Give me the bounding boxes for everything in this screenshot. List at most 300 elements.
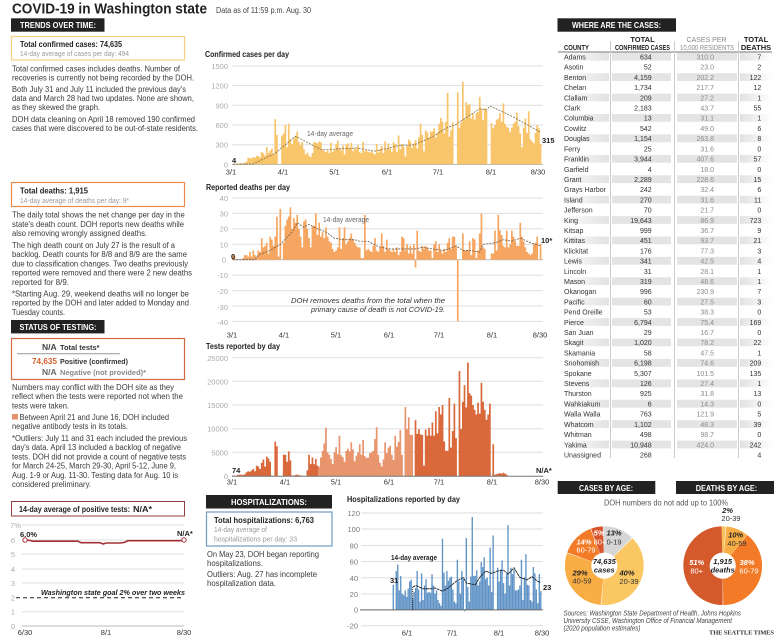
callout: test totals: Total tests*: [60, 343, 100, 352]
callout: positive test average: N/A*: [133, 504, 153, 514]
table: cases per 10,000 residents: 27.2: [700, 95, 714, 102]
table: county names: Pierce: [564, 320, 584, 327]
text block: deaths notes: also removing wrongly assigned deaths.: [12, 229, 147, 238]
table: cases per 10,000 residents: 23.0: [700, 65, 714, 72]
donut chart: cases by age: 74,635: [593, 557, 617, 566]
chart: confirmed cases per day: 300: [215, 141, 228, 150]
table: total confirmed cases: 763: [640, 412, 652, 419]
callout: test totals: N/A: [42, 342, 57, 352]
table: total deaths: 1: [757, 381, 761, 388]
callout: total hospitalizations: hospitalizations per day: 33: [214, 534, 297, 544]
chart: confirmed cases per day: 8/30: [531, 168, 545, 176]
chart: tests reported by day: 10000: [207, 425, 228, 434]
callout: total hospitalizations: [206, 512, 332, 546]
table: county names: Benton: [564, 75, 586, 82]
chart title: Tests reported by day: [206, 342, 280, 351]
table: county names: Lewis: [564, 259, 582, 266]
table: total confirmed cases: 270: [640, 197, 652, 204]
text block: cases notes: [12, 64, 198, 133]
table: cases per 10,000 residents: 28.1: [700, 269, 714, 276]
text block: hospitalization notes: hospitalization data.: [207, 579, 276, 588]
table: cases per 10,000 residents: 121.9: [696, 412, 714, 419]
table: total confirmed cases: [630, 54, 652, 460]
text block: cases notes: Total confirmed cases includes deaths. Number of: [12, 64, 181, 74]
chart: tests reported by day: 4/1: [280, 478, 290, 486]
table: county names: Spokane: [564, 371, 592, 378]
chart: confirmed cases per day: 14-day average: [307, 129, 353, 138]
table: total deaths: 135: [750, 371, 761, 378]
line chart: positive tests: 8/1: [101, 628, 111, 637]
table: cases per 10,000 residents: [696, 54, 714, 449]
line chart: positive tests: [10, 521, 193, 637]
table: total confirmed cases: 319: [640, 279, 652, 286]
text block: cases notes: as they skewed the graph.: [12, 103, 100, 112]
table column headers: 10,000 RESIDENTS: [680, 45, 734, 52]
text block: deaths notes: The daily total shows the net change per day in the: [12, 210, 185, 220]
chart: reported deaths per day: 6/1: [384, 330, 394, 340]
chart: confirmed cases per day: [205, 50, 555, 176]
donut chart: cases by age: 14%: [576, 538, 592, 546]
table: cases per 10,000 residents: 38.3: [700, 310, 714, 317]
text block: sources: [564, 610, 741, 632]
chart: tests reported by day: 74: [232, 466, 241, 475]
subtitle: data timestamp: Data as of 11:59 p.m. Aug. 30: [216, 6, 311, 15]
table: cases per 10,000 residents: 43.7: [700, 106, 714, 112]
table: county names: Cowlitz: [564, 126, 587, 133]
table: county names: Snohomish: [564, 361, 599, 368]
chart: tests reported by day: 7/1: [434, 478, 444, 486]
heading: status of testing: STATUS OF TESTING:: [20, 322, 97, 332]
callout: total deaths: 14-day average of deaths per day: 9*: [20, 196, 129, 205]
callout: total confirmed cases: Total confirmed cases: 74,635: [20, 40, 122, 49]
line chart: positive tests: 0: [11, 622, 15, 631]
table: county names: Mason: [564, 279, 585, 286]
table: total confirmed cases: 70: [644, 208, 652, 215]
table: county names: [564, 54, 607, 460]
line chart: positive tests: 1: [11, 608, 15, 616]
note: age data: DOH numbers do not add up to 100%: [604, 498, 728, 508]
chart: hospitalizations reported by day: 100: [347, 525, 360, 534]
table: total confirmed cases: 19,643: [630, 218, 652, 225]
chart: confirmed cases per day: 6/1: [382, 168, 392, 176]
table: total deaths: [750, 54, 761, 460]
table: total deaths: 7: [757, 289, 761, 296]
table: total deaths: 1: [757, 350, 761, 357]
table: cases per 10,000 residents: 263.8: [696, 136, 714, 143]
table: total deaths: 723: [750, 218, 761, 225]
text block: hospitalization notes: hospitalizations.: [207, 559, 263, 568]
table: cases per 10,000 residents: 49.0: [700, 126, 714, 133]
table: cases per 10,000 residents: 407.6: [696, 157, 714, 164]
table: total deaths: 9: [757, 228, 761, 235]
table column headers: TOTAL: [630, 35, 655, 44]
table: cases per 10,000 residents: 86.9: [700, 218, 714, 225]
chart: reported deaths per day: 0: [231, 252, 235, 261]
table: total deaths: 21: [754, 238, 761, 245]
table: cases per 10,000 residents: 93.7: [700, 238, 714, 245]
text block: hospitalization notes: Outliers: Aug. 27 has incomplete: [207, 570, 318, 579]
table: total confirmed cases: 542: [640, 126, 652, 133]
donut chart: cases by age: 29%: [571, 568, 588, 578]
chart: hospitalizations reported by day: 20: [350, 590, 358, 599]
text block: sources: University CSSE, Washington Office of Financial Management: [564, 618, 733, 625]
donut chart: deaths by age: 20-39: [721, 514, 741, 523]
chart: reported deaths per day: -20: [217, 287, 228, 296]
annotation: removals note: DOH removes deaths from the total when the: [291, 296, 445, 305]
table: cases per 10,000 residents: 16.7: [700, 330, 714, 337]
table: county names: Clallam: [564, 95, 588, 102]
table: cases per 10,000 residents: 31.6: [700, 197, 714, 204]
table: county names: Asotin: [564, 65, 584, 72]
text block: deaths notes: reported for 8/9.: [12, 278, 69, 287]
line chart: positive tests: Washington state goal 2% over two weeks: [41, 588, 185, 597]
chart: hospitalizations reported by day: 80: [350, 542, 358, 550]
table: county names: Walla Walla: [564, 412, 601, 419]
text block: testing notes: *Outliers: July 11 and 31 each included the previous: [12, 434, 187, 443]
heading: where are the cases: [558, 18, 676, 32]
table: total deaths: 15: [754, 177, 761, 184]
table: total deaths: 1: [757, 279, 761, 286]
chart: reported deaths per day: 0: [222, 256, 226, 265]
table: total confirmed cases: 31: [644, 269, 652, 276]
table: total confirmed cases: 498: [640, 432, 652, 439]
table: county names: Okanogan: [564, 289, 596, 296]
donut chart: cases by age: 80+: [594, 538, 607, 546]
table: county names: Stevens: [564, 381, 590, 388]
table: total confirmed cases: 341: [640, 259, 652, 266]
callout: total confirmed cases: [12, 36, 184, 60]
text block: deaths notes: [12, 210, 192, 317]
table: total confirmed cases: 126: [640, 381, 652, 388]
table: total confirmed cases: 451: [640, 238, 652, 245]
table: total confirmed cases: 2,183: [634, 106, 652, 112]
table: cases per 10,000 residents: 32.4: [700, 187, 714, 194]
chart: hospitalizations reported by day: 31: [390, 576, 398, 585]
table: total deaths: 39: [754, 422, 761, 429]
text block: sources: (2020 population estimates): [564, 625, 640, 632]
text block: testing notes: negative antibody tests in its totals.: [12, 422, 128, 431]
chart: reported deaths per day: 30: [220, 209, 228, 218]
table: cases per 10,000 residents: 27.5: [700, 299, 714, 306]
chart: confirmed cases per day: 600: [215, 121, 228, 130]
table: total confirmed cases: 6,794: [634, 320, 652, 327]
table: county names: Lincoln: [564, 269, 586, 276]
table: county names: Jefferson: [564, 208, 593, 215]
text block: cases notes: DOH data cleaning on April 18 removed 190 confirmed: [12, 115, 195, 124]
table: total confirmed cases: 268: [640, 452, 652, 460]
text block: cases notes: Both July 31 and July 11 included the previous day's: [12, 85, 186, 94]
table: cases per 10,000 residents: 31.8: [700, 391, 714, 398]
table: county names: Whatcom: [564, 422, 594, 429]
table: cases per 10,000 residents: 47.5: [700, 350, 714, 357]
title: COVID-19 in Washington state: [12, 2, 207, 18]
chart: hospitalizations reported by day: 14-day average: [391, 553, 437, 562]
table: county names: Skagit: [564, 340, 584, 347]
text block: testing notes: Numbers may conflict with the DOH site as they: [12, 383, 174, 392]
table: total deaths: 122: [750, 75, 761, 82]
line chart: positive tests: 2: [11, 594, 15, 602]
table: cases per 10,000 residents: 217.7: [696, 85, 714, 92]
chart: reported deaths per day: 5/1: [331, 330, 341, 340]
chart: confirmed cases per day: 1200: [211, 82, 228, 91]
chart: hospitalizations reported by day: [347, 495, 551, 637]
chart: reported deaths per day: 4/1: [279, 330, 289, 340]
table column headers: CONFIRMED CASES: [615, 43, 670, 52]
table: total deaths: 209: [750, 361, 761, 368]
table: total confirmed cases: 29: [644, 330, 652, 337]
table: cases per 10,000 residents: 98.7: [700, 432, 714, 439]
table: total confirmed cases: 4,159: [634, 75, 652, 82]
donut chart: deaths by age: 1,915: [713, 557, 733, 566]
chart: tests reported by day: 8/1: [487, 478, 497, 486]
chart: tests reported by day: N/A*: [536, 466, 552, 475]
table: total deaths: 0: [757, 330, 761, 337]
table: cases per 10,000 residents: 78.2: [700, 340, 714, 347]
chart: hospitalizations reported by day: 120: [347, 509, 360, 518]
table: cases per 10,000 residents: 36.7: [700, 228, 714, 235]
table: total deaths: 8: [757, 136, 761, 143]
callout: total deaths: [12, 182, 184, 206]
text block: sources: Sources: Washington State Department of Health, Johns Hopkins: [564, 610, 741, 618]
chart: reported deaths per day: 10: [220, 241, 228, 250]
table: county names: Columbia: [564, 116, 594, 123]
table: total deaths: 11: [754, 197, 761, 204]
text block: cases notes: data and March 28 had two updates. None are shown,: [12, 94, 194, 103]
panel: county table: [558, 18, 773, 460]
chart: tests reported by day: 5000: [211, 448, 228, 457]
credit: The Seattle Times: THE SEATTLE TIMES: [709, 629, 774, 636]
table: total confirmed cases: 60: [644, 299, 652, 306]
chart: confirmed cases per day: 4: [232, 156, 237, 165]
table: total confirmed cases: 242: [640, 187, 652, 194]
table: cases per 10,000 residents: 202.2: [696, 75, 714, 82]
donut chart: cases by age: cases: [594, 566, 615, 574]
chart: confirmed cases per day: 315: [542, 136, 555, 145]
table: total deaths: 0: [757, 401, 761, 408]
text block: deaths notes: state's death count. DOH reports new deaths while: [12, 220, 185, 229]
chart: tests reported by day: 3/1: [227, 478, 237, 486]
table: county names: Island: [564, 197, 583, 204]
text block: deaths notes: due to classification changes. Two deaths previously: [12, 260, 188, 268]
table: county names: San Juan: [564, 330, 594, 337]
chart: reported deaths per day: 14-day average: [323, 215, 369, 224]
table: total deaths: 6: [757, 126, 761, 133]
chart title: Confirmed cases per day: [205, 50, 289, 59]
chart: reported deaths per day: -30: [217, 303, 228, 312]
table column headers: DEATHS: [741, 43, 771, 52]
table: total deaths: 4: [757, 452, 761, 460]
donut chart: cases by age: 40%: [618, 568, 635, 578]
text block: hospitalization notes: On May 23, DOH began reporting: [207, 550, 319, 559]
annotation: removals note: primary cause of death is not COVID-19.: [310, 305, 445, 314]
table: cases per 10,000 residents: 75.4: [700, 320, 714, 327]
chart: tests reported by day: 0: [224, 472, 228, 481]
table: total confirmed cases: 1,734: [634, 85, 652, 92]
table: total deaths: 2: [757, 65, 761, 72]
table: county names: Franklin: [564, 157, 589, 164]
callout: positive test average: 14-day average of positive tests:: [19, 505, 130, 514]
table: cases per 10,000 residents: 48.6: [700, 279, 714, 286]
donut chart: cases by age: 60-79: [576, 546, 596, 554]
text block: testing notes: Between April 21 and June 16, DOH included: [20, 413, 169, 422]
table: total deaths: 1: [757, 95, 761, 102]
table: cases per 10,000 residents: 48.3: [700, 422, 714, 429]
heading: deaths by age: [676, 481, 774, 494]
chart: reported deaths per day: 10*: [541, 236, 552, 245]
chart: reported deaths per day: -10: [217, 271, 228, 280]
line chart: positive tests: 8/30: [177, 628, 191, 637]
table: county names: Thurston: [564, 391, 592, 398]
line chart: positive tests: N/A*: [177, 529, 193, 538]
table: county names: Yakima: [564, 442, 587, 449]
table: county names: Wahkiakum: [564, 401, 600, 408]
chart: reported deaths per day: 7/1: [434, 330, 444, 340]
chart: tests reported by day: 6/1: [384, 478, 394, 486]
donut chart: deaths by age: deaths: [711, 566, 735, 574]
line chart: positive tests: 7%: [10, 521, 21, 530]
table: total confirmed cases: 176: [640, 248, 652, 255]
table row bands: [558, 53, 773, 448]
chart: confirmed cases per day: 900: [215, 101, 228, 110]
heading: status of testing: [11, 320, 104, 333]
table: total deaths: 0: [757, 310, 761, 317]
text block: testing notes: [12, 383, 187, 489]
donut chart: deaths by age: 10%: [728, 530, 744, 540]
donut chart: deaths by age: 40-59: [727, 539, 747, 548]
table: cases per 10,000 residents: 74.6: [700, 361, 714, 368]
table: county names: Ferry: [564, 146, 581, 153]
table: total confirmed cases: 209: [640, 95, 652, 102]
table column headers: CASES PER: [686, 37, 727, 44]
callout: total hospitalizations: Total hospitalizations: 6,763: [214, 516, 315, 525]
table: total confirmed cases: 2,289: [634, 177, 652, 184]
table: total deaths: 6: [757, 187, 761, 194]
heading: deaths by age: DEATHS BY AGE:: [696, 483, 757, 493]
callout: total hospitalizations: 14-day average of: [214, 525, 268, 534]
heading: trends over time: TRENDS OVER TIME:: [20, 20, 96, 30]
line chart: positive tests: 6: [11, 536, 15, 545]
text block: deaths notes: *Starting Aug. 29, weekend deaths will no longer be: [12, 290, 190, 298]
table: county names: Kittitas: [564, 238, 586, 245]
table: total deaths: 55: [754, 106, 761, 112]
donut chart: cases by age: 5%: [594, 528, 605, 538]
table: county names: Skamania: [564, 350, 595, 357]
table: cases per 10,000 residents: 27.4: [700, 381, 714, 388]
table: total deaths: 1: [757, 116, 761, 123]
donut chart: cases by age: 40-59: [572, 576, 592, 586]
donut chart: deaths by age: 60-79: [739, 566, 759, 575]
table: total confirmed cases: 58: [644, 350, 652, 357]
chart title: Hospitalizations reported by day: [347, 495, 461, 504]
annotation: removals note: [291, 296, 445, 314]
table: county names: Pend Oreille: [564, 310, 603, 317]
text block: testing notes: reflect when the tests were reported not when the: [12, 392, 184, 401]
chart title: Reported deaths per day: [206, 183, 290, 192]
table: total confirmed cases: 634: [640, 54, 652, 62]
donut chart: deaths by age: 38%: [739, 558, 755, 567]
table: cases per 10,000 residents: 101.5: [696, 371, 714, 378]
table: total deaths: 3: [757, 248, 761, 255]
table: total confirmed cases: 3,944: [634, 157, 652, 164]
chart: reported deaths per day: 8/30: [533, 330, 547, 340]
text block: deaths notes: reported were removed and there were 2 new deaths: [12, 268, 192, 278]
callout: test totals: Negative (not provided)*: [60, 368, 146, 377]
heading: trends over time: [11, 18, 104, 32]
text block: deaths notes: reported by the DOH and later added to Monday and: [12, 298, 189, 308]
table: county names: Pacific: [564, 299, 585, 306]
chart: confirmed cases per day: 0: [224, 160, 228, 169]
table: total confirmed cases: 4: [648, 167, 652, 174]
table: total deaths: 7: [757, 54, 761, 62]
text block: testing notes: day's data. April 13 included a backlog of negative: [12, 443, 182, 452]
table: total deaths: 169: [750, 320, 761, 327]
donut chart: cases by age: 0-19: [606, 538, 622, 546]
heading: where are the cases: WHERE ARE THE CASES:: [572, 20, 661, 30]
table: total deaths: 0: [757, 208, 761, 215]
table column headers: TOTAL: [744, 35, 769, 44]
text block: cases notes: recoveries is currently not being recorded by the DOH.: [12, 74, 194, 82]
table: total deaths: 22: [754, 340, 761, 347]
chart: confirmed cases per day: 4/1: [278, 168, 288, 176]
chart: hospitalizations reported by day: 60: [350, 558, 358, 567]
chart: confirmed cases per day: 7/1: [433, 168, 443, 176]
donut chart: deaths by age: 51%: [689, 558, 705, 567]
chart: hospitalizations reported by day: 23: [543, 583, 551, 592]
panel: trends over time: [11, 18, 198, 317]
table: total confirmed cases: 5,307: [634, 371, 652, 378]
table: total confirmed cases: 13: [644, 116, 652, 123]
table: total confirmed cases: 52: [644, 65, 652, 72]
table: total deaths: 0: [757, 146, 761, 153]
table: total confirmed cases: 53: [644, 310, 652, 317]
table: county names: Grays Harbor: [564, 187, 607, 194]
table: total deaths: 0: [757, 432, 761, 439]
heading: cases by age: [558, 481, 655, 494]
table: cases per 10,000 residents: 31.1: [700, 116, 714, 123]
heading: hospitalizations: HOSPITALIZATIONS:: [231, 497, 307, 507]
line chart: positive tests: 6/30: [18, 628, 32, 637]
table: county names: Garfield: [564, 167, 589, 174]
table: total confirmed cases: 1,020: [634, 340, 652, 347]
table: total deaths: 3: [757, 299, 761, 306]
chart: confirmed cases per day: 3/1: [226, 168, 236, 176]
chart: reported deaths per day: 8/1: [487, 330, 497, 340]
text block: testing notes: for March 24-25, March 29-30, April 5-12, June 9,: [12, 462, 176, 470]
chart: hospitalizations reported by day: -20: [347, 622, 358, 631]
text block: deaths notes: backlog. Death counts for 8/8 and 8/9 are the same: [12, 250, 188, 259]
table: county names: Chelan: [564, 85, 586, 92]
donut chart: deaths by age: [689, 506, 759, 592]
line chart: positive tests: 3: [11, 579, 15, 588]
text block: hospitalization notes: [207, 550, 319, 588]
table: total confirmed cases: 999: [640, 228, 652, 235]
chart: tests reported by day: 15000: [207, 401, 228, 410]
heading: cases by age: CASES BY AGE:: [579, 483, 633, 493]
callout: test totals: Positive (confirmed): [60, 357, 128, 366]
table: county names: Klickitat: [564, 248, 588, 255]
line chart: positive tests: 5: [11, 550, 15, 559]
donut chart: cases by age: 13%: [606, 528, 622, 538]
table: cases per 10,000 residents: 31.6: [700, 146, 714, 153]
callout: positive test average: [12, 502, 184, 516]
callout: test totals: [12, 338, 184, 380]
table: total deaths: 57: [754, 157, 761, 164]
chart: tests reported by day: 25000: [207, 354, 228, 363]
chart: reported deaths per day: 20: [220, 225, 228, 234]
table: cases per 10,000 residents: 310.0: [696, 54, 714, 62]
table: total deaths: 1: [757, 269, 761, 276]
donut chart: cases by age: 20-39: [619, 577, 639, 586]
